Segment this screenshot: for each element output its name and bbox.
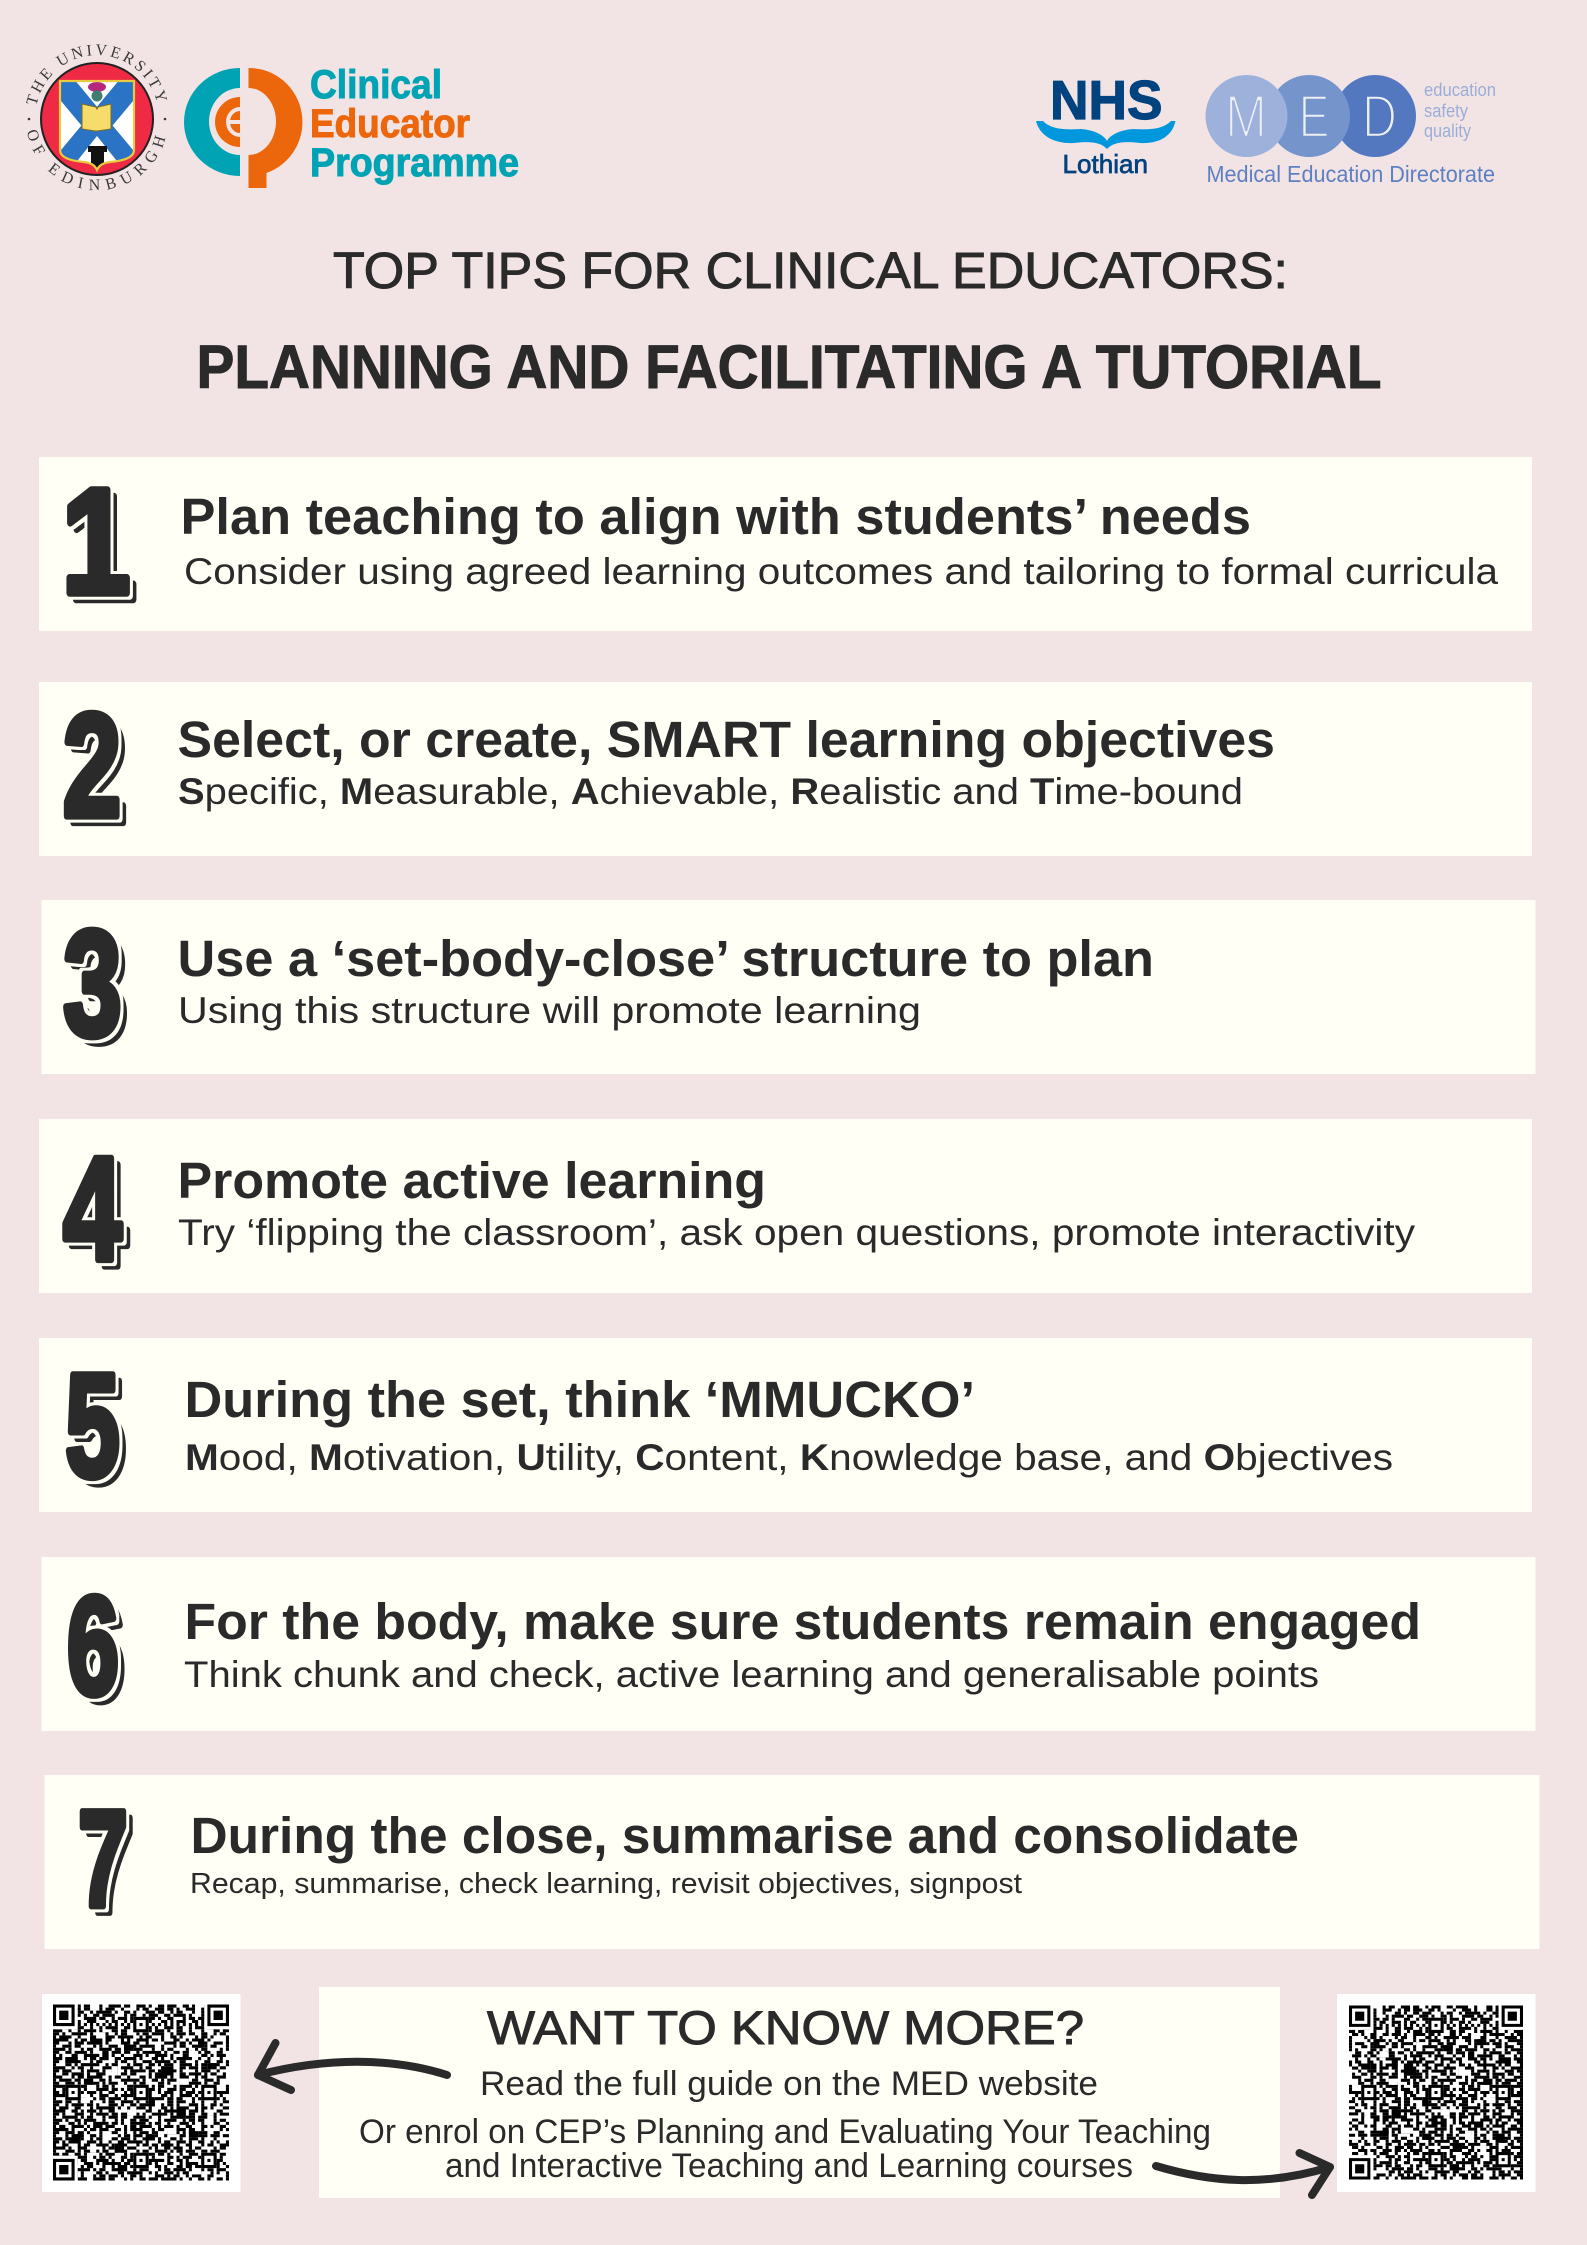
tip 1 heading: Plan teaching to align with students’ needs: [180, 488, 1251, 545]
tip 5 detail: Mood, Motivation, Utility, Content, Knowledge base, and Objectives: [185, 1437, 1393, 1478]
CEP wordmark: Programme: [310, 141, 519, 185]
CEP wordmark: Educator: [310, 102, 470, 146]
tip 5 heading: During the set, think ‘MMUCKO’: [184, 1371, 975, 1428]
panel: want to know more: [319, 1987, 1280, 2198]
panel: tip 6: [42, 1557, 1536, 1731]
logo: Medical Education Directorate: Medical Education Directorate: [1206, 161, 1495, 187]
tip 6 heading: For the body, make sure students remain engaged: [184, 1593, 1421, 1650]
CEP orange e: [215, 97, 240, 147]
QR code: CEP courses: [1337, 1994, 1536, 2192]
tip 3 detail: Using this structure will promote learning: [178, 990, 921, 1031]
CEP orange P: [248, 68, 302, 188]
title line 1: TOP TIPS FOR CLINICAL EDUCATORS:: [333, 242, 1288, 299]
title: [196, 242, 1382, 401]
CEP teal arc: [184, 68, 240, 176]
CEP courses lines: and Interactive Teaching and Learning courses: [445, 2147, 1133, 2185]
tip 2 heading: Select, or create, SMART learning objectives: [178, 711, 1275, 768]
logo: Medical Education Directorate: [1206, 75, 1496, 187]
tip 2 detail: Specific, Measurable, Achievable, Realistic and Time-bound: [178, 771, 1243, 812]
tip 4 heading: Promote active learning: [178, 1152, 766, 1209]
NHS wave: [1036, 121, 1176, 149]
arrow: to left QR code: [258, 2043, 447, 2090]
MED strapline: [1424, 80, 1496, 141]
tip 7 detail: Recap, summarise, check learning, revisit objectives, signpost: [190, 1868, 1022, 1900]
panel: tip 2: [39, 682, 1532, 856]
crest ring lettering: [26, 44, 168, 190]
crest shield: [60, 81, 134, 171]
title line 2: PLANNING AND FACILITATING A TUTORIAL: [196, 333, 1382, 401]
crest red roundel: [41, 63, 153, 175]
logo: Clinical Educator Programme: [184, 63, 519, 188]
more heading: WANT TO KNOW MORE?: [487, 2001, 1084, 2054]
number 6: 6: [67, 1568, 119, 1725]
logo: Medical Education Directorate: E: [1298, 83, 1330, 150]
logo: NHS Lothian: [1036, 69, 1176, 179]
crest ring lettering: THE UNIVERSITY: [26, 44, 168, 104]
panel: tip 4: [39, 1119, 1532, 1293]
CEP wordmark: [310, 63, 519, 185]
QR code: MED website: [42, 1994, 240, 2192]
tip 7 heading: During the close, summarise and consolidate: [190, 1807, 1299, 1864]
tip 4 detail: Try ‘flipping the classroom’, ask open questions, promote interactivity: [178, 1212, 1416, 1253]
logo: Medical Education Directorate: M: [1225, 83, 1267, 150]
tip 1 detail: Consider using agreed learning outcomes and tailoring to formal curricula: [184, 551, 1498, 592]
panel: tip 1: [39, 457, 1532, 631]
CEP wordmark: Clinical: [310, 63, 442, 107]
MED strapline: quality: [1424, 121, 1471, 141]
panel: tip 3: [42, 900, 1536, 1074]
MED strapline: education: [1424, 80, 1496, 100]
MED strapline: safety: [1424, 101, 1468, 121]
number 4: 4: [63, 1127, 122, 1292]
logo: Medical Education Directorate: D: [1362, 83, 1397, 150]
tip 6 detail: Think chunk and check, active learning and generalisable points: [184, 1654, 1319, 1695]
logo: University of Edinburgh crest: [26, 44, 168, 190]
arrow: to right QR code: [1156, 2153, 1330, 2195]
MED website line: Read the full guide on the MED website: [480, 2065, 1098, 2103]
logo: NHS Lothian: Lothian: [1062, 149, 1148, 179]
tip 3 heading: Use a ‘set-body-close’ structure to plan: [178, 930, 1154, 987]
number 2: 2: [63, 684, 121, 848]
MED circles: [1206, 75, 1416, 157]
number 5: 5: [65, 1344, 120, 1508]
CEP courses lines: Or enrol on CEP’s Planning and Evaluating Your Teaching: [359, 2113, 1211, 2151]
logo: NHS Lothian: NHS: [1050, 69, 1162, 131]
CEP courses lines: [359, 2113, 1211, 2185]
panel: tip 7: [44, 1775, 1540, 1949]
number 7: 7: [78, 1782, 128, 1936]
crest ring lettering: OF EDINBURGH: [28, 130, 166, 190]
number 1: 1: [62, 459, 130, 626]
number 3: 3: [63, 901, 122, 1067]
panel: tip 5: [39, 1338, 1532, 1512]
